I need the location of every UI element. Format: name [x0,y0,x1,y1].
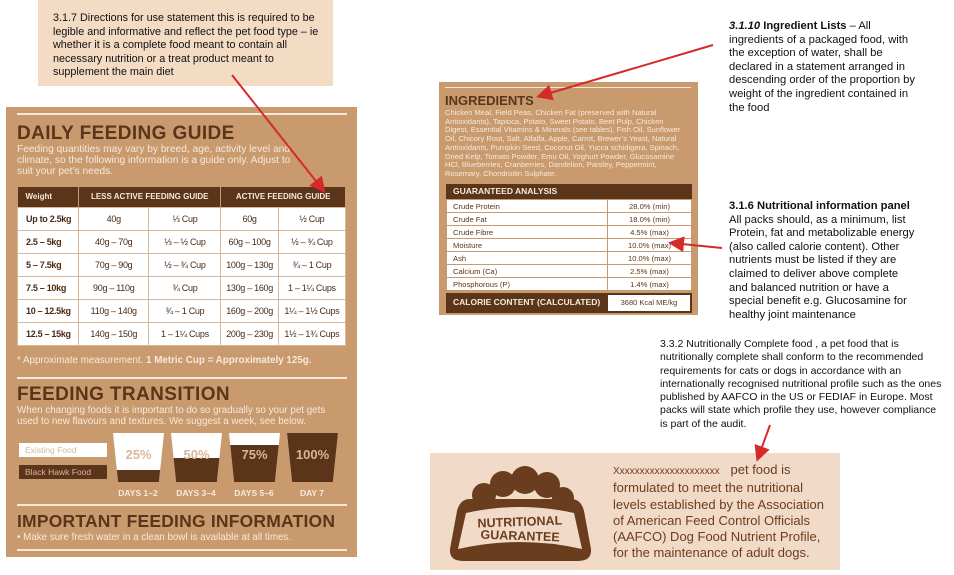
arrow: to moisture [672,243,722,248]
text: guarantee statement: for the maintenance of adult dogs. [613,545,810,560]
labels: days: DAYS 5–6 [234,488,274,498]
table: feeding guide: 90g – 110g [93,282,134,292]
table: feeding guide: 40g – 70g [95,236,132,246]
callout: 3.1.6 nutritional panel: (also called calorie content). Other [729,241,899,253]
table: feeding guide [17,187,346,346]
callout: 3.3.2 complete food [660,338,941,430]
arrow: to ingredients [540,45,713,96]
text: guarantee statement: (AAFCO) Dog Food Nutrient Profile, [613,529,820,544]
callout: 3.1.10 ingredient lists: ingredients of a packaged food, with [729,34,908,46]
callout: 3.1.10 ingredient lists: the exception of water, shall be [729,47,883,59]
heading: ingredients: INGREDIENTS [445,93,534,108]
labels: days: DAYS 3–4 [176,488,216,498]
table: feeding guide: ⅓ Cup [172,214,197,224]
callout: 3.1.10 ingredient lists: 3.1.10 Ingredient Lists – All [729,20,871,32]
table: feeding guide: ACTIVE FEEDING GUIDE [236,192,331,201]
text: ingredient list: Chicken Meal, Field Peas, Chicken Fat (preserved with Natural [445,108,656,117]
callout: 3.3.2 complete food: 3.3.2 Nutritionally Complete food , a pet food that is [660,338,899,350]
table: feeding guide: Weight [26,192,52,201]
table: feeding guide: LESS ACTIVE FEEDING GUIDE [91,192,208,201]
legend: existing food [19,443,107,457]
table: feeding guide: 100g – 130g [226,260,273,270]
table: guaranteed analysis: 28.0% (min) [629,202,670,210]
table: feeding guide: ¾ – 1 Cup [165,306,204,316]
callout: 3.1.10 ingredient lists: descending order of the proportion by [729,74,915,86]
table: feeding guide: 12.5 – 15kg [26,328,71,338]
row: calorie content: 3680 Kcal ME/kg [621,298,677,307]
icon: food bowl badge: NUTRITIONAL [477,514,563,530]
icon: food bowl badge: GUARANTEE [480,528,560,544]
text: water note: • Make sure fresh water in a clean bowl is available at all times. [17,532,291,543]
table: guaranteed analysis: Crude Fibre [453,228,493,236]
table: guaranteed analysis: Phosphorous (P) [453,280,510,288]
table: guaranteed analysis: 1.4% (max) [630,280,669,288]
icon: cup 75% [229,433,280,482]
table: feeding guide: ½ – ¾ Cup [291,236,333,246]
callout: 3.3.2 complete food: published by AAFCO in the US or FEDIAF in Europe. Most [660,391,933,403]
table: feeding guide: ⅓ – ½ Cup [164,236,206,246]
table: guaranteed analysis: Crude Protein [453,202,500,210]
table: guaranteed analysis: 10.0% (max) [628,254,671,262]
table: guaranteed analysis: 2.5% (max) [630,266,669,276]
labels: days [118,488,324,498]
table: feeding guide: 10 – 12.5kg [26,306,71,316]
icon: cup 25% [113,433,164,482]
callout: 3.3.2 complete food: packs will state which profile they use, however compliance [660,404,936,416]
callout: 3.1.6 nutritional panel: Protein, fat and metabolizable energy [729,227,914,239]
text: ingredient list: Oil, Chicory Root, Salt, Alfalfa, Apple, Carrot, Brewer’s Yeast, Natural [445,134,676,143]
panel: feeding guide [6,107,357,557]
callout: 3.1.7 directions [38,0,333,86]
table: guaranteed analysis [446,184,692,290]
icon: food bowl badge [450,466,592,561]
text: feeding intro: Feeding quantities may vary by breed, age, activity level and [17,144,290,155]
callout: 3.1.6 nutritional panel: 3.1.6 Nutritional information panel [729,200,910,212]
callout: 3.1.6 nutritional panel [729,200,914,321]
table: guaranteed analysis: Calcium (Ca) [453,266,497,276]
text: ingredient list: Digest, Essential Vitamins & Minerals (see tables), Fish Oil, Sunflower [445,125,680,134]
text: guarantee statement: Xxxxxxxxxxxxxxxxxxxxx pet food is [613,462,790,477]
heading: feeding transition: FEEDING TRANSITION [17,384,230,405]
text: guarantee statement: formulated to meet the nutritional [613,480,803,495]
legend: black hawk food [19,465,107,479]
table: feeding guide: 130g – 160g [226,282,273,292]
icon: cup 50% [171,433,222,482]
callout: 3.3.2 complete food: nutritionally complete shall conform to the recommended [660,351,923,363]
row: calorie content [446,293,692,313]
text: guarantee statement: of American Feed Control Officials [613,513,810,528]
callout: 3.1.6 nutritional panel: nutrients must be listed if they are [729,254,896,266]
icon: cup 100%: 100% [296,447,329,462]
table: feeding guide: ¾ Cup [172,282,197,292]
labels: days: DAY 7 [300,488,324,498]
text: feeding intro [17,144,290,177]
table: guaranteed analysis: Ash [453,254,466,262]
table: guaranteed analysis: Crude Fat [453,214,487,224]
table: feeding guide: 40g [107,214,121,224]
table: feeding guide: 1¼ – 1½ Cups [284,306,339,316]
callout: 3.1.10 ingredient lists: the food [729,102,769,114]
text: transition intro [17,405,325,427]
legend: black hawk food: Black Hawk Food [25,467,91,477]
text: transition intro: When changing foods it is important to do so gradually so your pet gets [17,405,325,416]
arrow: to active guide [232,75,323,190]
table: feeding guide: 1 – 1¼ Cups [161,328,209,338]
text: ingredient list: Antioxidants, Pumpkin Seed, Coconut Oil, Yucca schidigera, Spinach, [445,143,679,152]
text: ingredient list: Dried Kelp, Tomato Powder, Emu Oil, Yoghurt Powder, Glucosamine [445,152,674,161]
callout: 3.1.10 ingredient lists: declared in a statement arranged in [729,61,905,73]
table: guaranteed analysis: 4.5% (max) [630,228,669,236]
callout: 3.1.6 nutritional panel: healthy joint maintenance [729,309,856,321]
icon: cup 100% [287,433,338,482]
callout: 3.3.2 complete food: internationally recognised nutritional profile such as the ones [660,378,941,390]
arrow: to guarantee [758,425,770,458]
callout: 3.1.6 nutritional panel: claimed to deliver above complete [729,268,898,280]
text: approximate measurement: * Approximate measurement. 1 Metric Cup = Approximately 125g. [17,355,311,366]
heading: daily feeding guide: DAILY FEEDING GUIDE [17,123,235,144]
table: feeding guide: 70g – 90g [95,260,132,270]
icon: cup 75%: 75% [241,447,268,462]
table: feeding guide: 1 – 1¼ Cups [288,282,336,292]
icon: cup 50%: 50% [183,447,210,462]
text: guarantee statement [613,462,824,560]
callout: 3.3.2 complete food: is part of the audit. [660,418,746,430]
callout: 3.1.6 nutritional panel: All packs should, as a minimum, list [729,214,906,226]
callout: 3.1.6 nutritional panel: special benefit e.g. Glucosamine for [729,295,907,307]
text: ingredient list: HCl, Blueberries, Cranberries, Dandelion, Parsley, Peppermint, [445,160,657,169]
table: feeding guide: ½ – ¾ Cup [164,260,206,270]
heading: important feeding information: IMPORTANT FEEDING INFORMATION [17,511,335,531]
legend: existing food: Existing Food [25,445,76,455]
text: transition intro: used to new flavours and textures. We suggest a week, see below. [17,416,306,427]
table: feeding guide: 2.5 – 5kg [26,236,61,246]
callout: 3.1.10 ingredient lists [729,20,915,114]
text: ingredient list [445,108,680,178]
table: feeding guide: 60g [242,214,257,224]
table: feeding guide: 160g – 200g [226,306,273,316]
table: feeding guide: ½ Cup [299,214,324,224]
table: guaranteed analysis: 10.0% (max) [628,240,671,250]
text: guarantee statement: levels established by the Association [613,497,824,512]
icon: cup 25%: 25% [125,447,152,462]
table: feeding guide: 7.5 – 10kg [26,282,66,292]
table: guaranteed analysis: Moisture [453,240,482,250]
text: feeding intro: climate, so the following information is a guide only. Adjust to [17,155,290,166]
panel: nutritional guarantee [430,453,840,570]
callout: 3.1.10 ingredient lists: weight of the ingredient contained in [729,88,908,100]
table: feeding guide: Up to 2.5kg [26,214,71,224]
table: feeding guide: 60g – 100g [229,236,271,246]
callout: 3.3.2 complete food: requirements for cats or dogs in accordance with an [660,365,901,377]
text: feeding intro: suit your pet’s needs. [17,166,113,177]
table: feeding guide: ¾ – 1 Cup [292,260,331,270]
table: feeding guide: 1½ – 1¾ Cups [284,328,339,338]
table: guaranteed analysis: GUARANTEED ANALYSIS [453,186,557,196]
text: ingredient list: Antioxidants), Tapioca, Potato, Sweet Potato, Beet Pulp, Chicken [445,117,664,126]
table: feeding guide: 5 – 7.5kg [26,260,61,270]
table: feeding guide: 140g – 150g [90,328,137,338]
callout: 3.1.6 nutritional panel: and balanced nutrition or have a [729,282,889,294]
table: feeding guide: 200g – 230g [226,328,273,338]
panel: ingredients [439,82,698,315]
row: calorie content: CALORIE CONTENT (CALCULATED) [453,297,600,307]
labels: days: DAYS 1–2 [118,488,158,498]
table: guaranteed analysis: 18.0% (min) [629,214,670,224]
text: ingredient list: Rosemary, Chondroitin Sulphate. [445,169,556,178]
table: feeding guide: 110g – 140g [91,306,137,316]
callout: 3.1.7 directions: 3.1.7 Directions for use statement this is required to be legible and informative and reflect the pet food type – ie whether it is a complete food meant to contain all necessary nutrition or a treat product meant to supplement the main diet [53,12,318,78]
